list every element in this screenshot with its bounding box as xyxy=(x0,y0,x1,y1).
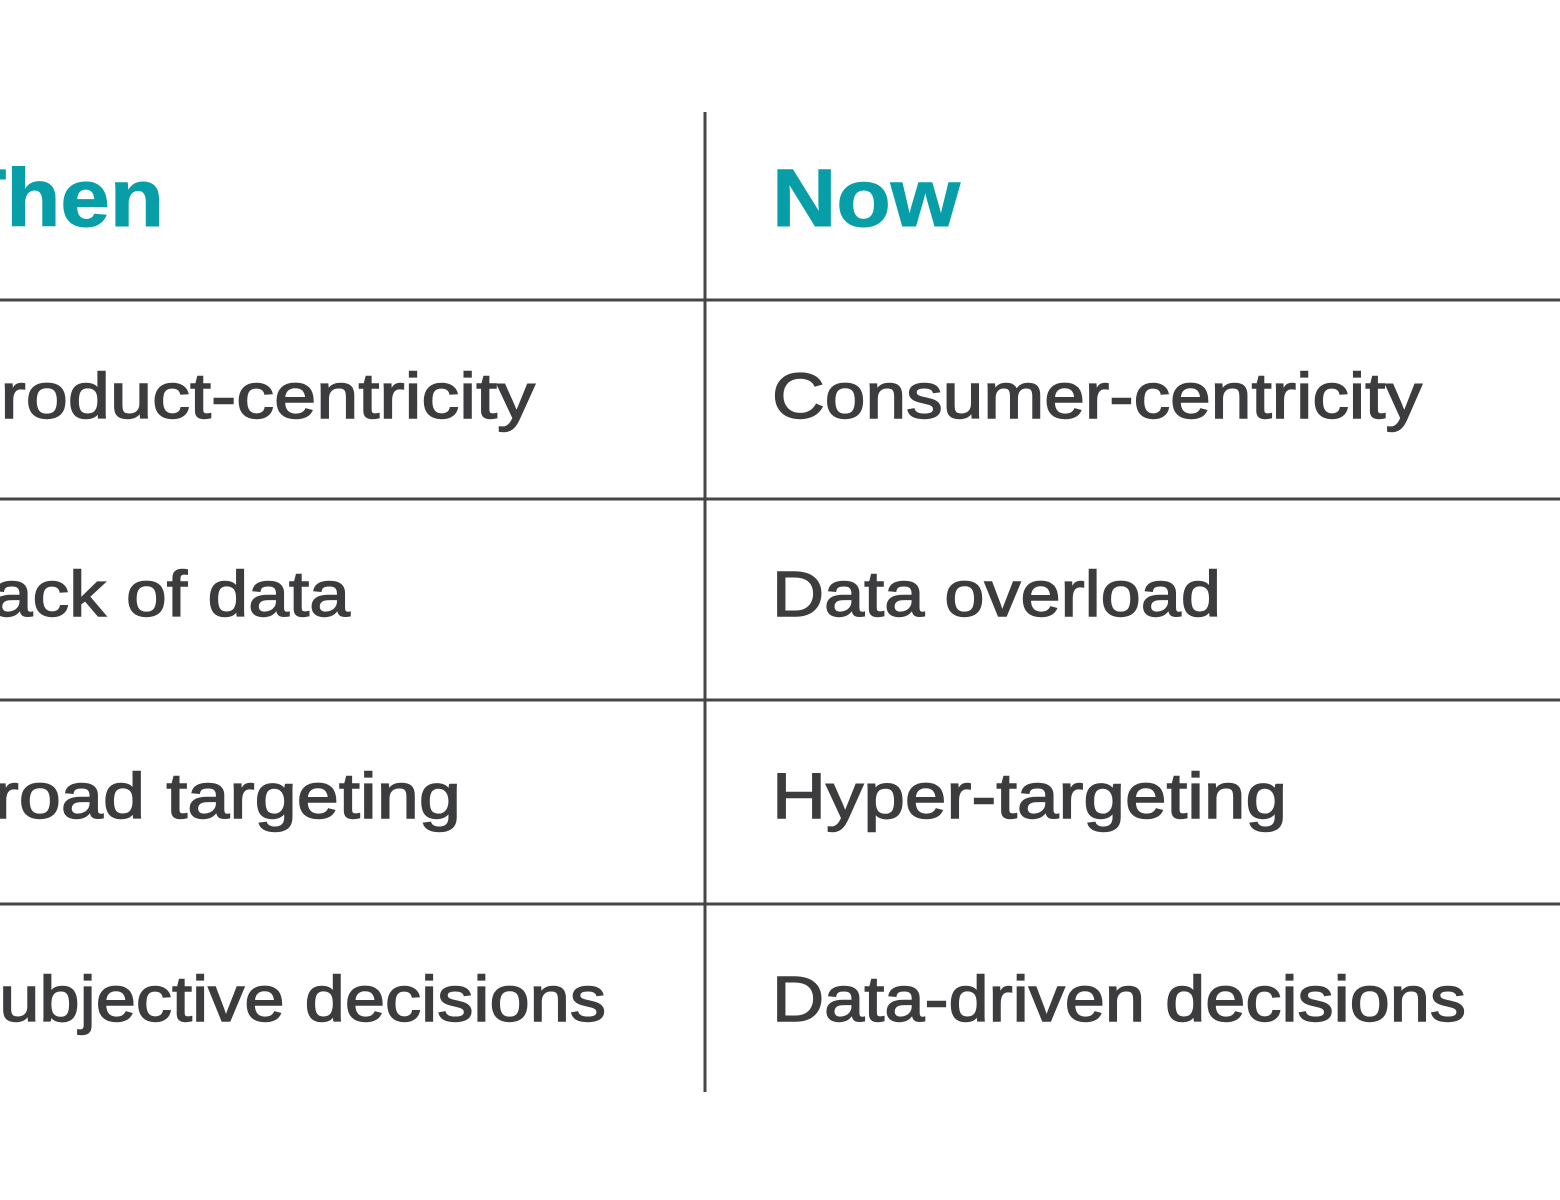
column heading: Now: Now xyxy=(772,153,960,244)
row 2, now: Data overload: Data overload xyxy=(772,558,1221,630)
row 1, now: Consumer-centricity: Consumer-centricity xyxy=(772,360,1422,432)
row 4, now: Data-driven decisions: Data-driven decisions xyxy=(772,963,1466,1035)
row 3, now: Hyper-targeting: Hyper-targeting xyxy=(772,760,1287,832)
